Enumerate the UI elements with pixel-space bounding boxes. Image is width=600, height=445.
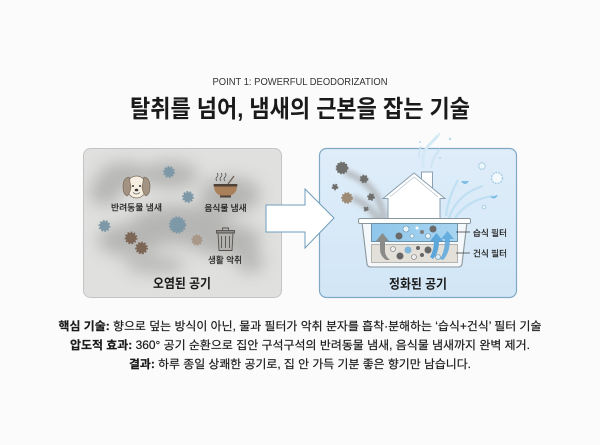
filter particles [390,226,440,260]
smoke streams [345,172,385,230]
panel: purified air [320,134,516,298]
icon: dog [123,176,150,198]
line: result: 결과: 하루 종일 상쾌한 공기로, 집 안 가득 기분 좋은 향기만 남습니다. [129,357,471,371]
label: dry filter: 건식 필터 [473,248,507,258]
clean air specks [419,138,451,159]
dry filter [372,244,458,262]
panel label: 오염된 공기 [153,276,211,291]
smog cloud [89,162,264,273]
wet filter [372,224,458,242]
gray particles [332,162,374,211]
line: core technology: 핵심 기술: 향으로 덮는 방식이 아닌, 물과 필터가 악취 분자를 흡착·분해하는 ‘습식+건식’ 필터 기술 [58,319,542,333]
icon: food bowl [214,173,238,198]
icon: trash can [216,228,234,250]
body text [58,319,542,371]
label: pet odor: 반려동물 냄새 [111,202,162,212]
line: effect: 압도적 효과: 360° 공기 순환으로 집안 구석구석의 반려동물 냄새, 음식물 냄새까지 완벽 제거. [70,338,530,352]
arrow: before to after [266,189,334,248]
arrows: blue up [430,231,454,260]
label: wet filter [456,228,507,238]
icon: filter tub [358,218,470,267]
label: dry filter [456,248,507,258]
title: 탈취를 넘어, 냄새의 근본을 잡는 기술 [130,96,470,123]
panel label: 정화된 공기 [389,276,447,292]
clean air plume [419,134,440,168]
label: wet filter: 습식 필터 [473,228,507,238]
icon: house [383,172,445,220]
label: household odor: 생활 악취 [208,255,242,265]
panel: polluted air [84,148,282,298]
clean streams [446,180,493,218]
arrow: gray up [376,233,390,260]
odor particles [100,167,202,253]
clean air icons [461,163,502,209]
label: food odor: 음식물 냄새 [204,203,246,213]
eyebrow heading: POINT 1: POWERFUL DEODORIZATION [212,77,388,88]
